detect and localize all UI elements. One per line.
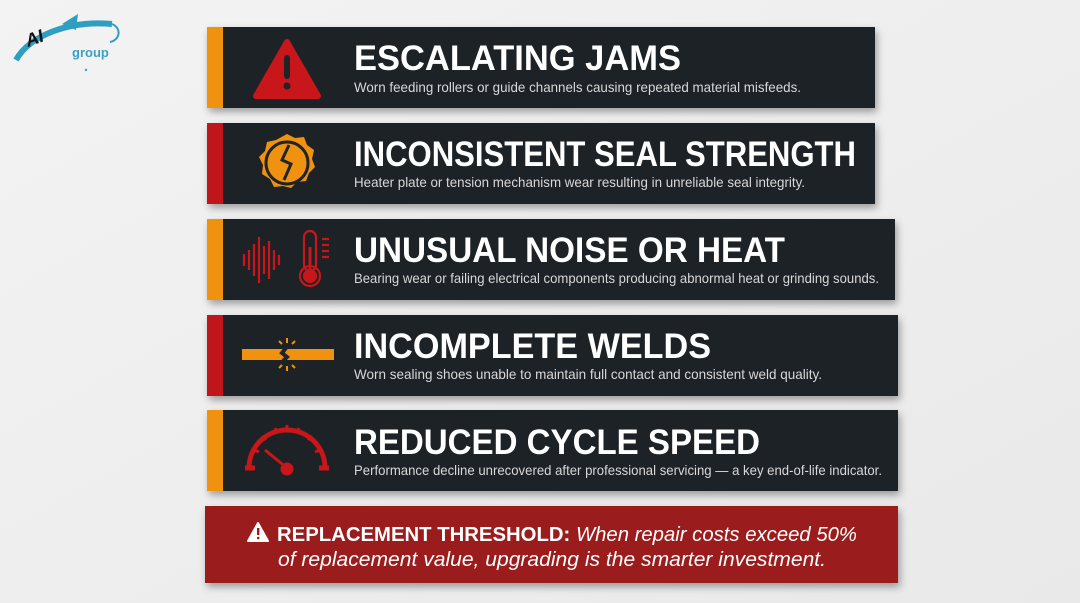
heading: REDUCED CYCLE SPEED <box>354 423 760 462</box>
panel: escalating jams <box>207 27 875 108</box>
logo: AI <box>22 25 47 51</box>
icon: speedometer <box>245 425 329 475</box>
panel: reduced cycle speed <box>207 410 898 491</box>
icon: warning triangle <box>256 42 318 96</box>
heading: UNUSUAL NOISE OR HEAT <box>354 231 785 270</box>
panel: incomplete welds <box>207 315 898 396</box>
text block: Bearing wear or failing electrical components producing abnormal heat or grinding sounds. <box>354 270 879 286</box>
text block: Worn feeding rollers or guide channels causing repeated material misfeeds. <box>354 79 801 95</box>
heading: INCONSISTENT SEAL STRENGTH <box>354 135 856 174</box>
icon: sound wave and thermometer <box>244 231 329 286</box>
icon: broken weld bar <box>242 338 334 371</box>
logo: group <box>72 45 109 60</box>
heading: ESCALATING JAMS <box>354 39 681 78</box>
callout: replacement threshold: of replacement value, upgrading is the smarter investment. <box>278 549 826 571</box>
panel: inconsistent seal strength <box>207 123 875 204</box>
panel: unusual noise or heat <box>207 219 895 300</box>
text block: REPLACEMENT THRESHOLD: When repair costs exceed 50% <box>277 524 857 546</box>
icon: cracked seal <box>259 134 315 188</box>
heading: INCOMPLETE WELDS <box>354 327 711 366</box>
text block: Performance decline unrecovered after professional servicing — a key end-of-life indicator. <box>354 462 882 478</box>
icon: warning <box>248 523 268 541</box>
callout: replacement threshold <box>205 506 898 583</box>
text block: Heater plate or tension mechanism wear resulting in unreliable seal integrity. <box>354 174 805 190</box>
logo <box>16 14 119 71</box>
text block: Worn sealing shoes unable to maintain full contact and consistent weld quality. <box>354 366 822 382</box>
